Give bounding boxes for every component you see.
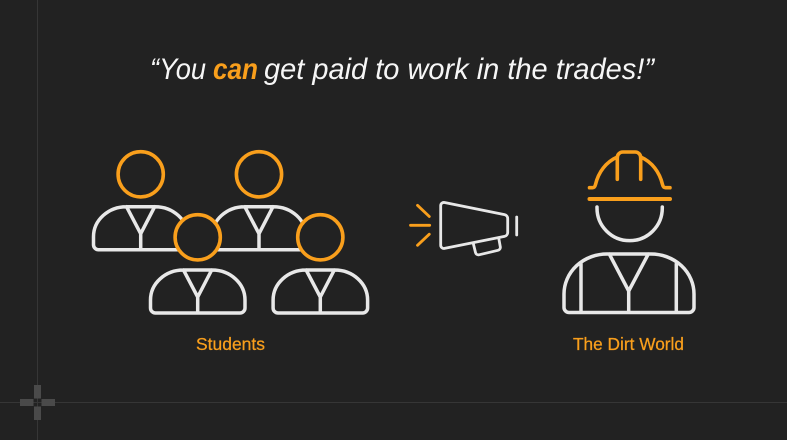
icon group: students [93,152,368,313]
icon: megaphone [410,202,517,255]
megaphone handle [473,238,500,255]
worker head [597,207,662,241]
megaphone body [441,202,508,248]
icon: student back right [212,152,306,250]
label: students: Students [196,334,265,354]
icon: student front left [150,215,245,313]
title: can [213,53,258,86]
title: “You [150,53,206,86]
label: the dirt world: The Dirt World [573,334,684,354]
icon: student front right [273,215,368,313]
icon: construction worker [564,152,694,312]
icon: corner crosshair mark [20,385,55,420]
megaphone sound rays [410,205,430,245]
worker body with vest [564,254,694,312]
megaphone back line [515,217,518,235]
title: get paid to work in the trades!” [264,53,656,86]
icon: student back left [93,152,188,250]
worker hard hat [590,152,670,199]
